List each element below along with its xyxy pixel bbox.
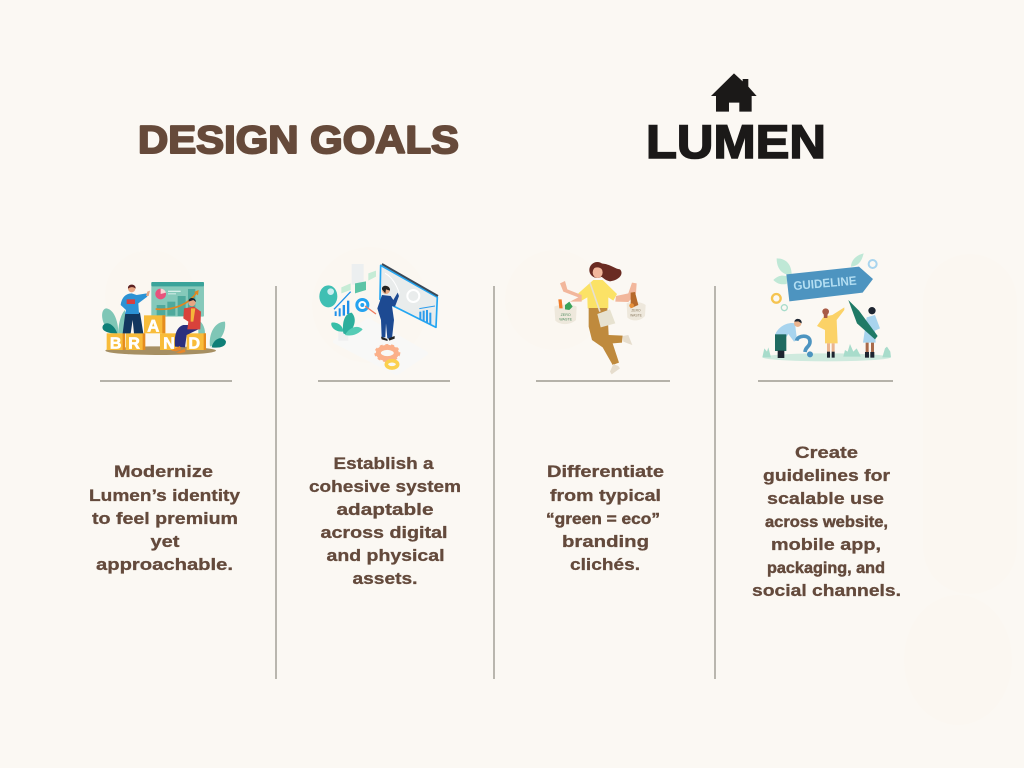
text block: goal 1: approachable. [96,555,233,574]
icon: brand blocks illustration: B [110,335,121,352]
text block: goal 3 [546,462,664,574]
icon: woman with eco bags illustration [554,262,646,374]
text block: goal 1 [89,462,241,574]
icon: digital system illustration [319,264,438,373]
icon: house [711,73,757,112]
text block: goal 1: to feel premium [92,509,238,528]
text block: goal 3: “green = eco” [546,511,660,528]
text block: goal 3: clichés. [570,555,640,574]
icon: woman with eco bags illustration: WASTE [630,313,643,317]
column dividers [276,286,715,679]
text block: goal 2: adaptable [336,500,434,519]
text block: goal 3: Differentiate [547,462,664,481]
icon: guideline signpost illustration [762,253,891,361]
text block: goal 2: across digital [320,523,448,542]
text block: goal 2: assets. [352,569,418,588]
icon: brand blocks illustration: N [163,335,175,352]
icon: guideline signpost illustration: GUIDELINE [793,274,857,293]
text block: goal 2: Establish a [334,454,434,473]
title: DESIGN GOALS [138,119,459,162]
icon: brand blocks illustration: D [189,335,200,352]
text block: goal 1: Lumen’s identity [89,486,241,505]
icon: woman with eco bags illustration: WASTE [559,317,573,321]
text block: goal 4: scalable use [767,489,884,508]
logo: Lumen [646,73,826,168]
icon: woman with eco bags illustration: ZERO [631,309,641,313]
text block: goal 4: social channels. [752,581,901,600]
icon: brand blocks illustration: R [128,335,140,352]
logo wordmark: LUMEN [646,115,826,168]
text block: goal 3: from typical [550,486,661,505]
short rules under icons [100,380,893,382]
decorative faint background shapes [105,247,1017,725]
text block: goal 4: mobile app, [771,535,881,554]
text block: goal 4 [752,443,901,600]
text block: goal 4: guidelines for [763,466,890,485]
text block: goal 3: branding [562,532,649,551]
icon: woman with eco bags illustration: ZERO [561,313,571,317]
text block: goal 2: cohesive system [309,477,461,496]
icon: brand blocks illustration: A [147,317,159,336]
text block: goal 4: across website, [765,514,888,531]
text block: goal 4: Create [795,443,858,462]
text block: goal 1: yet [150,532,180,551]
text block: goal 2: and physical [326,546,444,565]
icon: brand blocks illustration [102,282,226,355]
text block: goal 4: packaging, and [767,560,885,577]
text block: goal 2 [309,454,461,588]
text block: goal 1: Modernize [114,462,213,481]
